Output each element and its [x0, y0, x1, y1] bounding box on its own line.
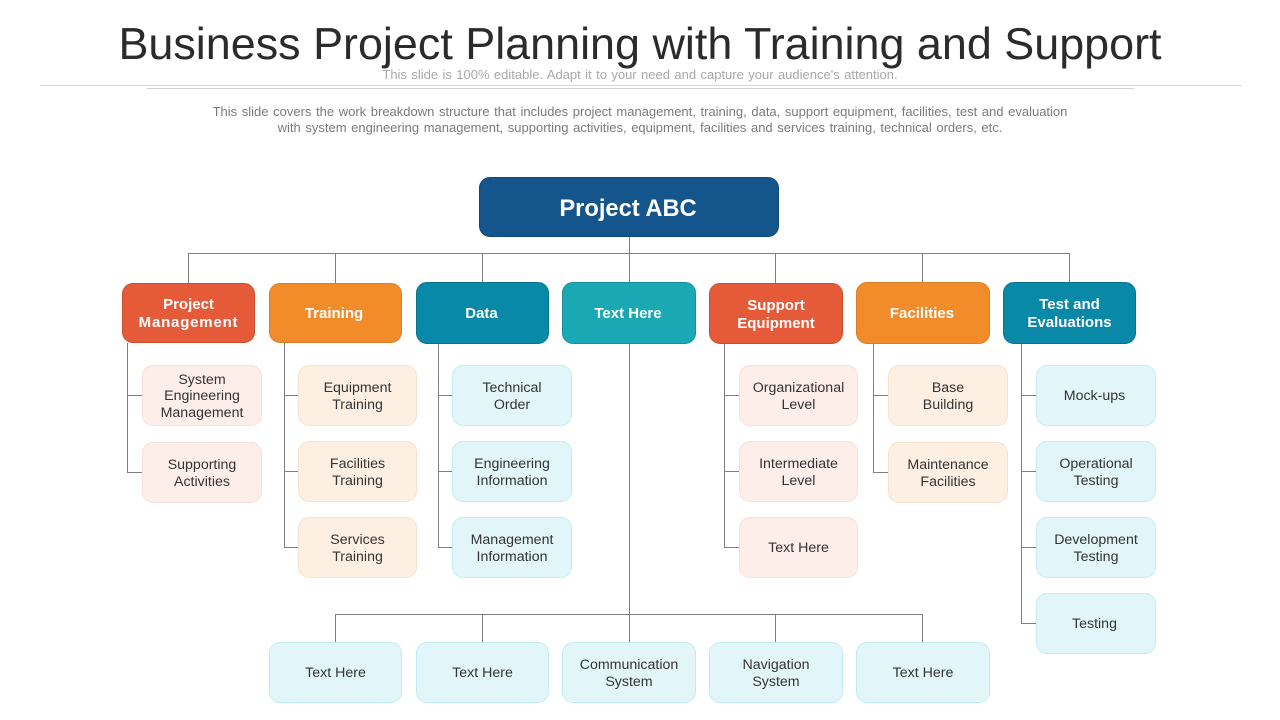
root node: Project ABC: Project ABC	[559, 196, 697, 222]
item: Maintenance Facilities: Facilities	[920, 474, 976, 490]
item: Facilities Training	[298, 441, 417, 502]
category: Support Equipment: Support	[747, 296, 805, 314]
item: Management Information: Management	[471, 532, 553, 548]
category: Test and Evaluations: Test and	[1039, 296, 1100, 313]
item: System Engineering Management	[142, 365, 262, 426]
item: Base Building: Base	[932, 380, 964, 396]
bottom item: Communication System	[562, 642, 696, 703]
item: Intermediate Level: Intermediate	[759, 456, 838, 472]
category: Text Here: Text Here	[594, 305, 662, 322]
bottom item: Text Here 2	[416, 642, 549, 703]
category: Training	[269, 283, 402, 343]
bottom item: Navigation System: Navigation	[742, 657, 810, 673]
bottom item: Navigation System	[709, 642, 843, 703]
item: Base Building: Building	[923, 396, 973, 412]
bottom item: Text Here 1: Text Here	[305, 665, 366, 681]
item: Development Testing	[1036, 517, 1156, 578]
category: Support Equipment	[709, 283, 843, 344]
item: Development Testing: Development	[1054, 532, 1138, 548]
description: This slide covers the work breakdown structure that includes project management, training, data, support equipment, facilities, test and evaluation	[213, 104, 1067, 119]
bottom item: Text Here 3	[856, 642, 990, 703]
category: Training: Training	[305, 305, 363, 322]
item: Mock-ups	[1036, 365, 1156, 426]
item: Base Building	[888, 365, 1008, 426]
category: Project Management: Management	[139, 314, 238, 331]
item: Management Information: Information	[476, 548, 547, 564]
item: Testing	[1036, 593, 1156, 654]
item: Technical Order: Order	[494, 396, 530, 412]
item: Technical Order	[452, 365, 572, 426]
item: Development Testing: Testing	[1074, 548, 1118, 564]
category: Facilities: Facilities	[890, 305, 954, 322]
item: Facilities Training: Training	[332, 472, 383, 488]
header rules	[40, 85, 1241, 89]
item: Text Here (support): Text Here	[768, 540, 829, 556]
item: Organizational Level	[739, 365, 858, 426]
category: Support Equipment: Equipment	[737, 314, 815, 332]
item: Intermediate Level	[739, 441, 858, 502]
category: Facilities	[856, 282, 990, 344]
item: Maintenance Facilities: Maintenance	[907, 457, 989, 473]
item: Engineering Information	[452, 441, 572, 502]
item: Maintenance Facilities	[888, 442, 1008, 503]
category: Text Here	[562, 282, 696, 344]
description	[212, 104, 1067, 135]
subtitle: This slide is 100% editable. Adapt it to your need and capture your audience's attention.	[382, 67, 898, 82]
root node: Project ABC	[479, 177, 779, 237]
item: Supporting Activities: Supporting	[168, 457, 236, 473]
item: Equipment Training: Equipment	[324, 380, 391, 396]
item: Equipment Training: Training	[332, 396, 383, 412]
title: Business Project Planning with Training and Support	[118, 18, 1162, 69]
item: Operational Testing	[1036, 441, 1156, 502]
bottom item: Text Here 2: Text Here	[452, 665, 513, 681]
item: Equipment Training	[298, 365, 417, 426]
item: Supporting Activities	[142, 442, 262, 503]
bottom item: Communication System: Communication	[580, 657, 678, 673]
bottom item: Text Here 1	[269, 642, 402, 703]
item: Engineering Information: Engineering	[474, 456, 550, 472]
item: Intermediate Level: Level	[782, 472, 815, 488]
item: Services Training: Training	[332, 548, 383, 564]
bottom item: Text Here 3: Text Here	[893, 665, 953, 681]
category: Data: Data	[465, 305, 498, 322]
item: Services Training: Services	[330, 532, 385, 548]
item: Management Information	[452, 517, 572, 578]
item: Organizational Level: Level	[782, 396, 815, 412]
item: Facilities Training: Facilities	[330, 456, 385, 472]
description: with system engineering management, supporting activities, equipment, facilities and services training, technical orders, etc.	[278, 120, 1002, 135]
item: Engineering Information: Information	[476, 472, 547, 488]
item: Text Here (support)	[739, 517, 858, 578]
item: Testing: Testing	[1072, 616, 1117, 632]
bottom item: Communication System: System	[605, 674, 653, 690]
category: Project Management: Project	[163, 296, 214, 313]
category: Test and Evaluations: Evaluations	[1027, 314, 1112, 331]
category: Data	[416, 282, 549, 344]
item: System Engineering Management: System	[178, 372, 226, 388]
item: System Engineering Management: Management	[161, 405, 243, 421]
item: Services Training	[298, 517, 417, 578]
item: System Engineering Management: Engineering	[164, 388, 240, 404]
item: Operational Testing: Testing	[1074, 472, 1118, 488]
item: Technical Order: Technical	[482, 380, 542, 396]
category: Project Management	[122, 283, 255, 343]
item: Operational Testing: Operational	[1059, 456, 1133, 472]
item: Organizational Level: Organizational	[753, 380, 844, 396]
bottom item: Navigation System: System	[752, 674, 800, 690]
item: Mock-ups: Mock-ups	[1064, 388, 1125, 404]
category: Test and Evaluations	[1003, 282, 1136, 344]
item: Supporting Activities: Activities	[174, 474, 230, 490]
